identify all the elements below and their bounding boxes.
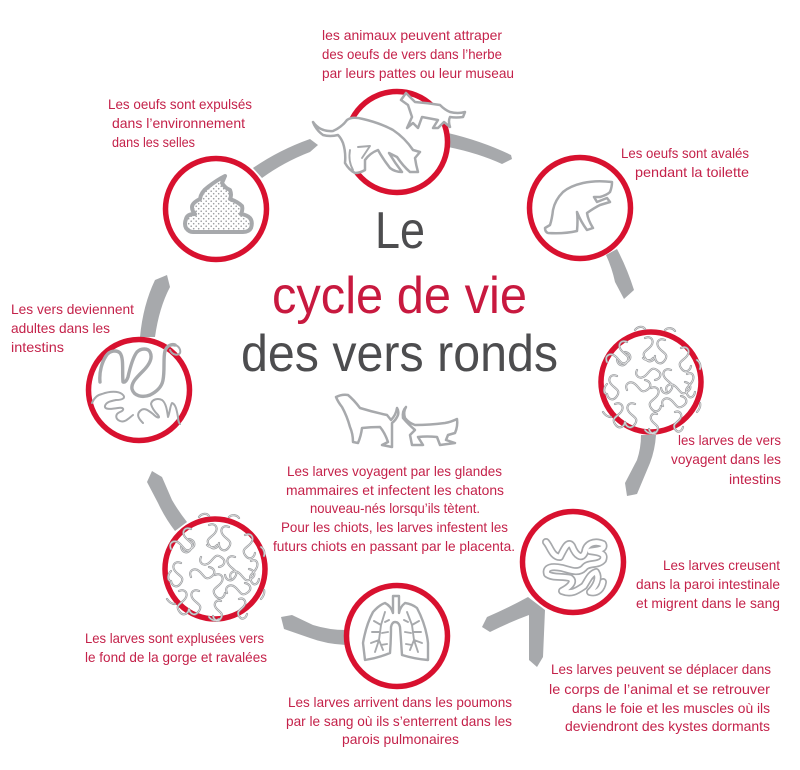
step: eggs swallowed, grooming cat [530, 158, 630, 258]
text: lungs: par le sang où ils s’enterrent dans les [286, 713, 512, 729]
icon: adult worms [92, 345, 180, 424]
text: larvae in intestines [671, 432, 781, 487]
text: adult worms [11, 301, 134, 355]
title [241, 202, 558, 383]
text: kittens and puppies: mammaires et infectent les chatons [286, 482, 504, 498]
icon: feces [185, 176, 252, 232]
text: larvae in intestines: voyagent dans les [671, 451, 781, 467]
step: adult worms [88, 340, 190, 440]
step: larvae in intestines, worms [601, 327, 701, 434]
text: eggs swallowed: pendant la toilette [635, 164, 749, 180]
text: grass contact: les animaux peuvent attraper [322, 27, 502, 43]
title line: des vers ronds: des vers ronds [241, 325, 558, 383]
text: dormant cysts: deviendront des kystes dormants [565, 718, 770, 734]
text: eggs swallowed: Les oeufs sont avalés [621, 145, 749, 161]
text: grass contact: par leurs pattes ou leur museau [322, 65, 514, 81]
text: throat [85, 630, 267, 665]
icon: dog sniffing [313, 118, 420, 173]
arrow: intestine to lungs and to cysts [482, 597, 545, 667]
text: dormant cysts: le corps de l’animal et se retrouver [549, 681, 770, 697]
icon: dog leg detail [349, 146, 370, 170]
text: intestine wall: Les larves creusent [663, 557, 780, 573]
text: dormant cysts [549, 661, 771, 734]
red ring [166, 158, 266, 260]
text: throat: Les larves sont explusées vers [85, 630, 264, 646]
icon: dog and cat standing [336, 395, 457, 447]
text: eggs expelled: dans l’environnement [112, 115, 245, 131]
red ring [601, 332, 701, 432]
text: lungs [286, 694, 512, 747]
step: intestine wall [522, 512, 624, 612]
text: intestine wall [636, 557, 780, 611]
text: intestine wall: et migrent dans le sang [636, 595, 780, 611]
text: adult worms: adultes dans les [11, 320, 110, 336]
text: kittens and puppies: nouveau-nés lorsqu’ils tètent. [310, 500, 480, 516]
arrow: lungs to throat [281, 615, 346, 645]
text: kittens and puppies: Pour les chiots, les larves infestent les [281, 519, 508, 535]
arrow: feces to top [253, 139, 318, 178]
text: lungs: Les larves arrivent dans les poumons [288, 694, 512, 710]
arrow: throat to adult worms [147, 471, 187, 531]
text: throat: le fond de la gorge et ravalées [85, 649, 267, 665]
step: feces with eggs [166, 158, 266, 260]
text: kittens and puppies: Les larves voyagent par les glandes [287, 463, 502, 479]
text: intestine wall: dans la paroi intestinale [636, 576, 780, 592]
arrow: adult worms to feces [140, 275, 170, 337]
arrow: grooming to larvae [606, 249, 634, 299]
icon: cat walking [401, 93, 465, 128]
icon: intestines [546, 542, 604, 592]
red ring [88, 340, 190, 440]
icon: grooming cat [545, 181, 612, 233]
text: adult worms: intestins [11, 339, 64, 355]
text: larvae in intestines: les larves de vers [678, 432, 781, 448]
text: grass contact: des oeufs de vers dans l’herbe [322, 46, 502, 62]
red ring [346, 586, 448, 686]
title line: Le: Le [375, 202, 425, 260]
text: kittens and puppies: futurs chiots en passant par le placenta. [273, 538, 515, 554]
red ring [165, 519, 265, 619]
arrow: top to cat grooming [448, 133, 512, 164]
text: larvae in intestines: intestins [729, 471, 781, 487]
red ring [530, 158, 630, 258]
icon: worm larvae [167, 514, 264, 621]
title line: cycle de vie: cycle de vie [272, 267, 527, 325]
text: eggs swallowed [621, 145, 749, 180]
icon: lungs [363, 596, 428, 660]
red ring [522, 512, 624, 612]
red ring [346, 92, 448, 192]
text: eggs expelled: dans les selles [112, 134, 195, 150]
text: adult worms: Les vers deviennent [11, 301, 134, 317]
icon: worm larvae [603, 327, 700, 434]
text: eggs expelled [108, 96, 252, 150]
text: dormant cysts: dans le foie et les muscles où ils [572, 700, 770, 716]
text: grass contact [322, 27, 514, 81]
arrow: larvae to intestine [625, 435, 656, 496]
text: dormant cysts: Les larves peuvent se déplacer dans [551, 661, 771, 677]
step: larvae in throat, worms [165, 514, 265, 621]
text: eggs expelled: Les oeufs sont expulsés [108, 96, 252, 112]
text: lungs: parois pulmonaires [342, 731, 459, 747]
text: kittens and puppies [273, 463, 515, 554]
step: lungs [346, 586, 448, 686]
step: grass contact, dog and cat [313, 92, 465, 192]
